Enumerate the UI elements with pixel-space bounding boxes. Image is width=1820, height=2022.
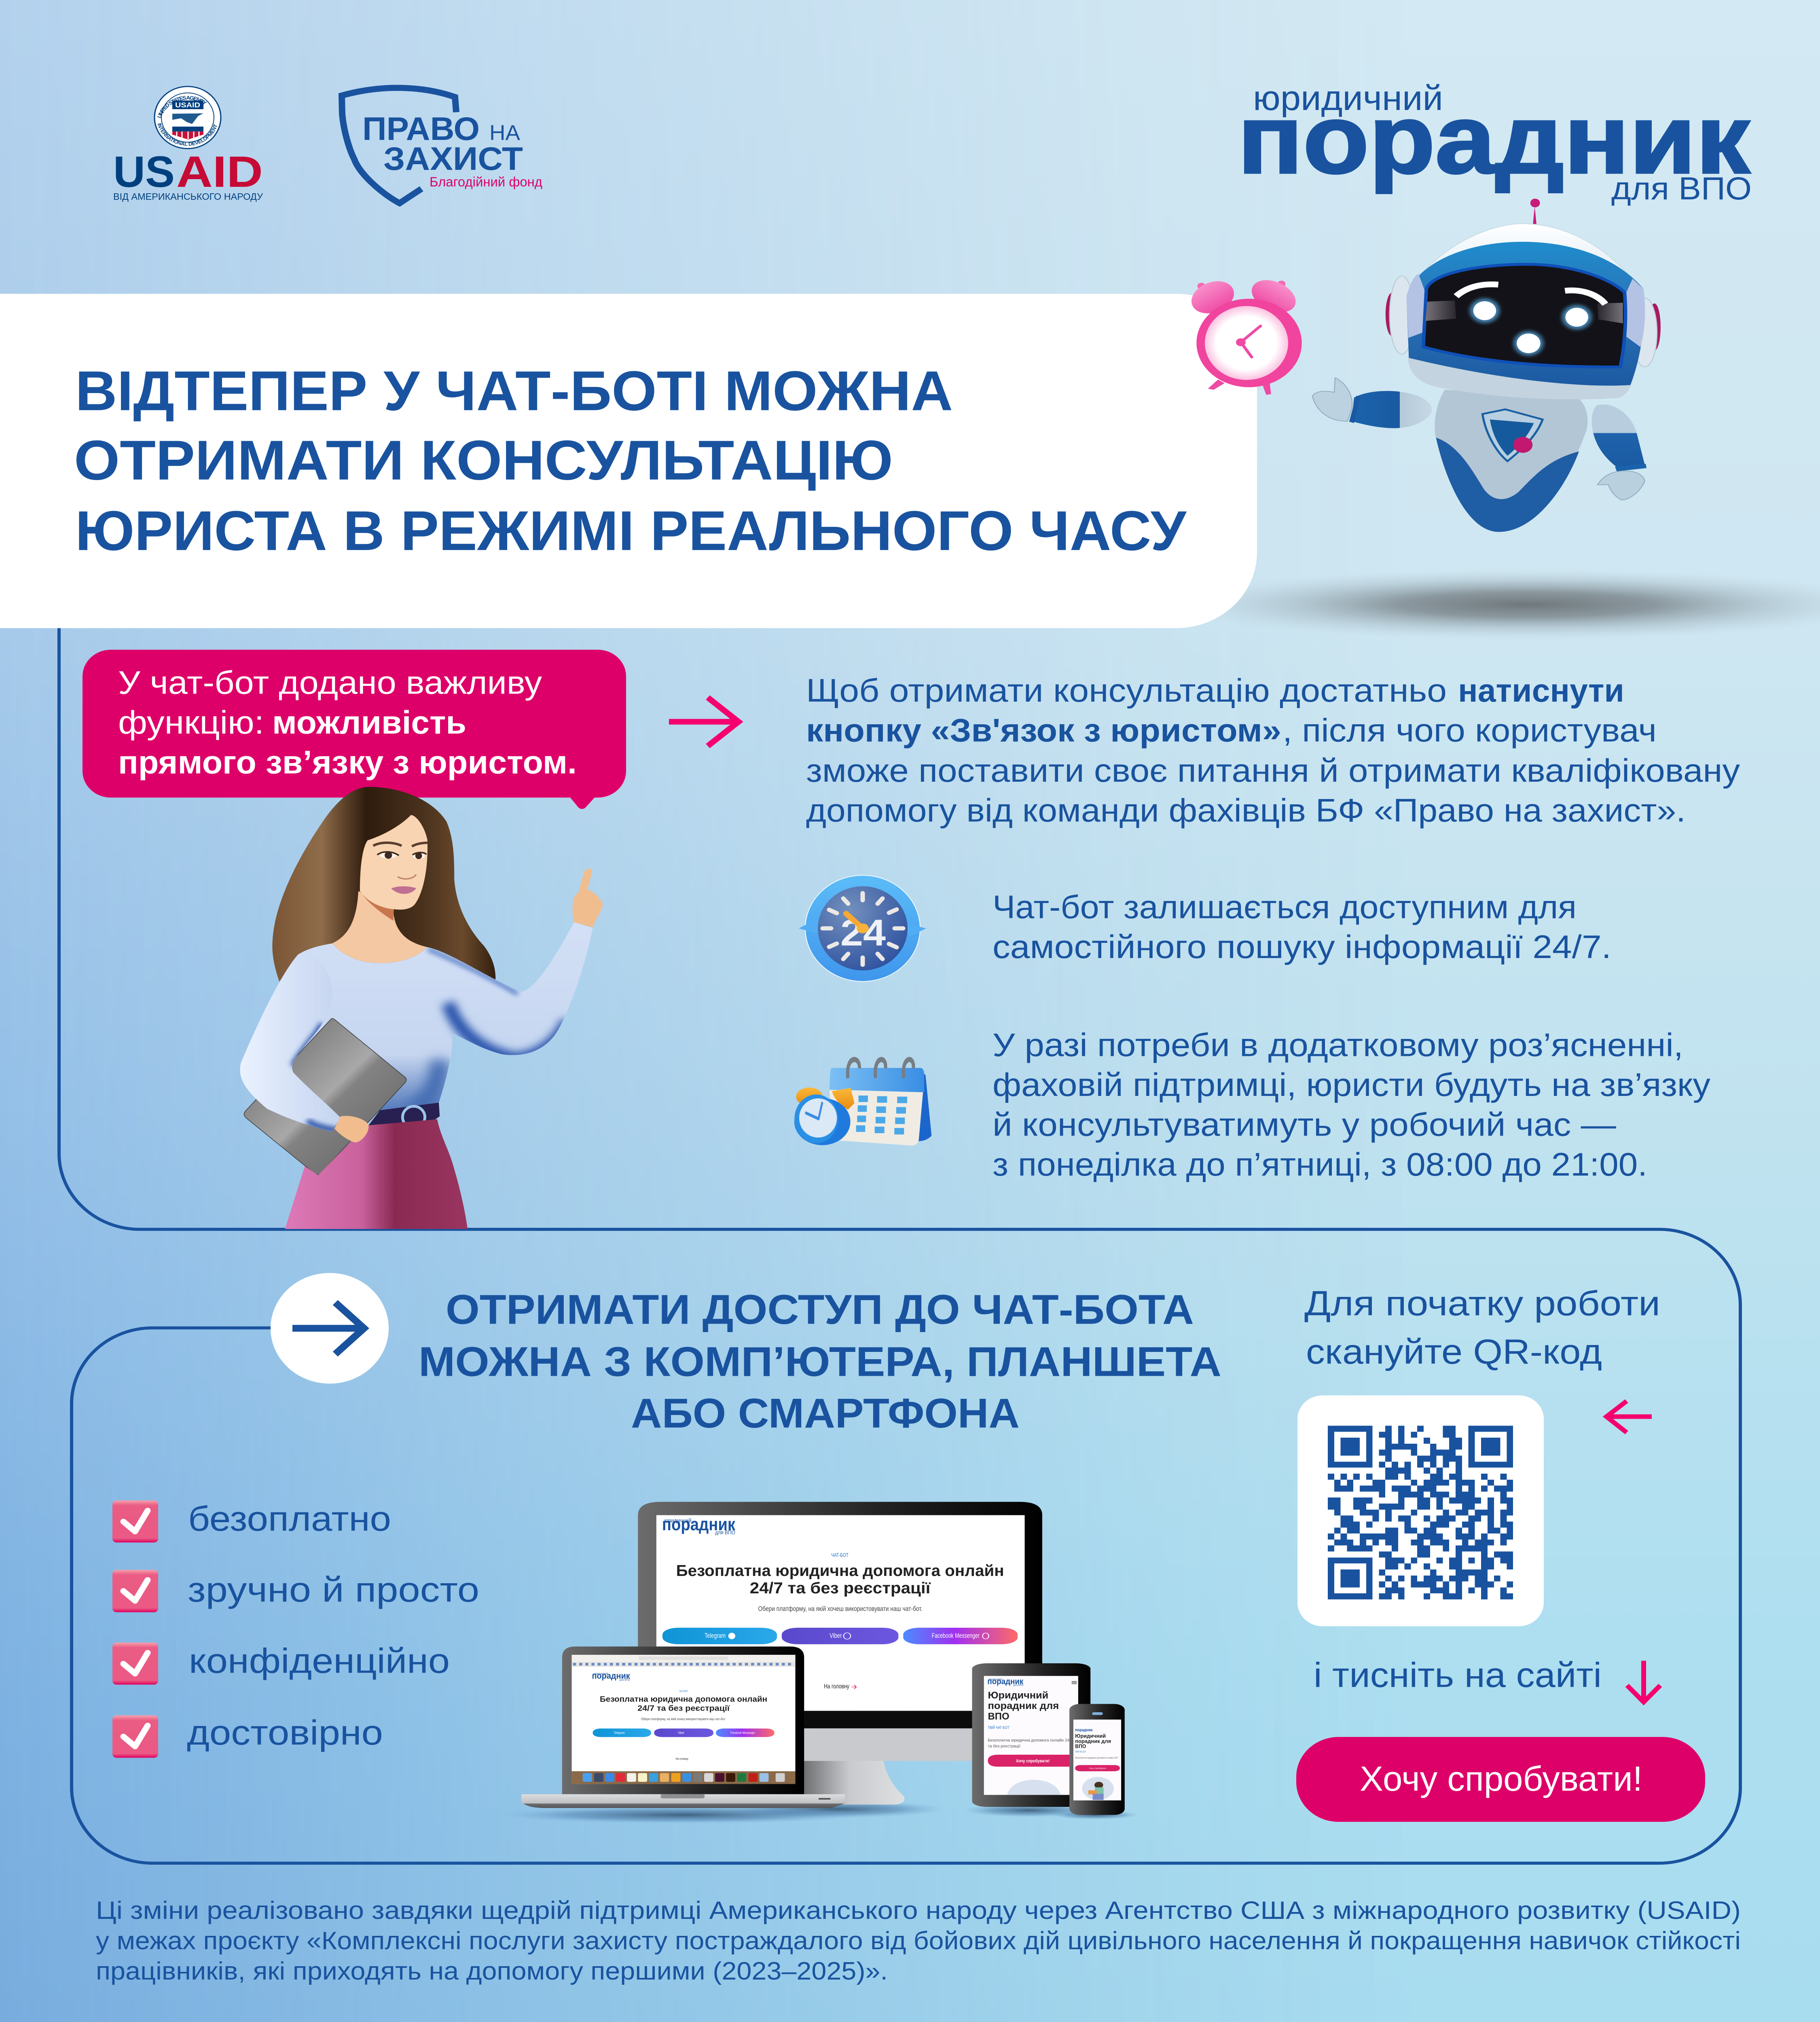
- icon: USAID seal: [154, 87, 221, 148]
- arrow: pink down arrow: [1627, 1661, 1660, 1702]
- text: working hours: фаховій підтримці, юристи будуть на зв’язку: [993, 1066, 1710, 1103]
- logo: Юридичний порадник для ВПО: порадник: [1238, 85, 1750, 194]
- monitor logo: [662, 1514, 735, 1536]
- text block: how to get consultation: , після чого користувач: [1282, 712, 1657, 749]
- checklist item: convenient: [112, 1570, 479, 1612]
- icon: white circle with blue arrow: [271, 1273, 389, 1383]
- monitor buttons: [662, 1628, 1018, 1644]
- heading: access to chat-bot: [419, 1286, 1221, 1436]
- monitor logo: юридичний: [664, 1517, 692, 1524]
- checklist item: confidential: конфіденційно: [189, 1641, 450, 1680]
- woman skirt: [285, 1119, 468, 1229]
- text: scan instruction: Для початку роботи: [1304, 1284, 1660, 1323]
- heading: access to chat-bot: ОТРИМАТИ ДОСТУП ДО ЧАТ-БОТА: [446, 1286, 1194, 1333]
- phone page text: [1075, 1728, 1118, 1759]
- illustration: robot: [1312, 199, 1661, 532]
- woman holding hand: [334, 1116, 369, 1142]
- footer note: працівників, які приходять на допомогу першими (2023–2025)».: [96, 1957, 888, 1985]
- logo wordmark: Право на захист: [362, 110, 523, 177]
- robot right arm: [1592, 404, 1646, 500]
- text: working hours: й консультуватимуть у робочий час —: [993, 1106, 1617, 1143]
- logo wordmark: USAID: AID: [176, 147, 263, 196]
- callout: pink speech bubble: [83, 650, 626, 809]
- logo wordmark: Право на захист: ЗАХИСТ: [383, 140, 523, 177]
- tablet person: [1007, 1780, 1060, 1795]
- callout text: У чат-бот додано важливу: [118, 664, 542, 701]
- text: working hours: [993, 1027, 1710, 1182]
- icon: calendar with alarm clock: [794, 1060, 931, 1146]
- arrow: pink left arrow: [1606, 1401, 1652, 1432]
- desktop monitor: [638, 1502, 1042, 1804]
- tablet page text: порадник для: [988, 1700, 1059, 1711]
- laptop page text: Безоплатна юридична допомога онлайн: [600, 1695, 767, 1703]
- woman pointing hand: [573, 869, 603, 927]
- tablet: [972, 1663, 1090, 1807]
- woman left arm: [240, 954, 341, 1132]
- text block: how to get consultation: натиснути: [1458, 673, 1624, 709]
- neck shadow: [360, 891, 394, 921]
- tablet page text: Безоплатна юридична допомога онлайн 24: [988, 1738, 1069, 1743]
- heading: main title: ВІДТЕПЕР У ЧАТ-БОТІ МОЖНА: [75, 360, 953, 422]
- text: available 24/7: Чат-бот залишається доступним для: [993, 889, 1577, 925]
- monitor page text: 24/7 та без реєстрації: [750, 1580, 931, 1597]
- laptop: порадник: [592, 1671, 630, 1681]
- woman face: [360, 815, 428, 909]
- text: available 24/7: [993, 889, 1611, 965]
- monitor buttons: Facebook Messenger: [932, 1631, 980, 1639]
- laptop: [521, 1647, 845, 1808]
- monitor back link: На головну: [824, 1683, 849, 1690]
- icon: brush shield: [342, 88, 456, 203]
- logo wordmark: Право на захист: НА: [489, 121, 521, 145]
- woman belt: [368, 1103, 440, 1128]
- checklist: [112, 1499, 479, 1758]
- tablet logo: юридичний: [989, 1678, 1002, 1681]
- laptop base: [521, 1794, 845, 1808]
- icon: USAID seal: USAID: [175, 101, 200, 109]
- icon: 24/7 clock: 24: [840, 912, 886, 954]
- button: try it: [1296, 1737, 1705, 1822]
- text: scan instruction: сканyйте QR-код: [1306, 1332, 1602, 1371]
- panel outline: connected rounded frame: [59, 626, 1740, 1863]
- illustration: woman pointing up: [240, 787, 603, 1229]
- robot ears: [1386, 276, 1661, 367]
- tablet page text: та без реєстрації: [988, 1744, 1020, 1748]
- checklist item: confidential: [112, 1641, 450, 1685]
- woman neck: [332, 891, 427, 963]
- checklist item: reliable: [112, 1713, 383, 1758]
- icon: 24/7 clock: [799, 875, 926, 981]
- laptop page text: ЧАТ-БОТ: [679, 1690, 688, 1693]
- phone try button: Хочу спробувати!: [1089, 1767, 1106, 1770]
- desktop monitor: порадник: [662, 1514, 735, 1534]
- woman shirt: [279, 922, 593, 1112]
- checklist item: convenient: зручно й просто: [188, 1570, 479, 1609]
- monitor buttons: Telegram: [705, 1631, 726, 1639]
- logo: Юридичний порадник для ВПО: юридичний: [1253, 78, 1443, 117]
- tagline: charitable foundation: Благодійний фонд: [430, 174, 542, 190]
- text block: how to get consultation: допомогу від команди фахівців БФ «Право на захист».: [806, 792, 1686, 829]
- text block: how to get consultation: Щоб отримати консультацію достатньо: [806, 673, 1447, 709]
- tagline: from the American people: ВІД АМЕРИКАНСЬКОГО НАРОДУ: [113, 192, 263, 202]
- callout text: функцію:: [118, 704, 264, 740]
- monitor buttons: Viber: [830, 1631, 842, 1639]
- heading: main title: [74, 360, 1187, 562]
- logo: USAID: [113, 87, 263, 202]
- monitor page text: Обери платформу, на якій хочеш використовувати наш чат-бот.: [758, 1605, 923, 1612]
- monitor page text: [676, 1552, 1004, 1612]
- text: scan instruction: [1304, 1284, 1660, 1371]
- phone page text: порадник для: [1075, 1739, 1111, 1744]
- logo wordmark: USAID: US: [113, 147, 175, 196]
- heading: main title: ЮРИСТА В РЕЖИМІ РЕАЛЬНОГО ЧАСУ: [75, 499, 1187, 562]
- phone page text: ВПО: [1075, 1744, 1086, 1749]
- text block: how to get consultation: [806, 673, 1740, 829]
- laptop dock: [572, 1771, 796, 1784]
- heading: main title: ОТРИМАТИ КОНСУЛЬТАЦІЮ: [74, 429, 893, 492]
- device shadows: [499, 1800, 1139, 1823]
- laptop page text: 24/7 та без реєстрації: [637, 1704, 730, 1713]
- illustration: device mockups: [499, 1502, 1139, 1823]
- laptop buttons: [593, 1728, 774, 1737]
- logo: Юридичний порадник для ВПО: для ВПО: [1611, 171, 1752, 206]
- laptop logo: [592, 1671, 630, 1681]
- robot body: [1435, 390, 1587, 532]
- tablet try button: [988, 1755, 1073, 1767]
- phone try button: [1075, 1765, 1120, 1771]
- laptop page text: Обери платформу, на якій хочеш використовувати наш чат-бот.: [641, 1717, 726, 1721]
- phone page text: Безоплатна юридична допомога онлайн 24/7: [1075, 1757, 1118, 1759]
- tablet page text: [988, 1681, 1077, 1748]
- heading: access to chat-bot: МОЖНА З КОМП’ЮТЕРА, ПЛАНШЕТА: [419, 1338, 1221, 1385]
- icon: pink alarm clock: [1184, 273, 1303, 395]
- text: working hours: з понеділка до п’ятниці, з 08:00 до 21:00.: [993, 1146, 1647, 1182]
- arrow: pink right arrow: [669, 698, 739, 746]
- tablet page text: Юридичний: [988, 1690, 1048, 1701]
- tablet: порадник: [987, 1677, 1024, 1686]
- checklist item: free: безоплатно: [188, 1499, 391, 1538]
- text: available 24/7: самостійного пошуку інформації 24/7.: [993, 929, 1611, 965]
- robot left arm: [1312, 378, 1432, 428]
- laptop: для ВПО: [620, 1679, 630, 1681]
- text: working hours: У разі потреби в додатковому роз’ясненні,: [993, 1027, 1683, 1063]
- phone person: [1082, 1777, 1114, 1800]
- QR code card: [1297, 1396, 1544, 1626]
- tablet logo: [987, 1677, 1024, 1687]
- monitor back link: [824, 1683, 856, 1690]
- tablet page text: ВПО: [988, 1711, 1009, 1722]
- text block: how to get consultation: кнопку «Зв'язок з юристом»: [806, 712, 1281, 749]
- phone page text: порадник: [1075, 1728, 1093, 1732]
- logo: Право на захист: [342, 88, 542, 203]
- panel: white headline banner: [0, 294, 1257, 628]
- woman hair: [272, 787, 495, 982]
- checklist item: free: [112, 1499, 391, 1542]
- monitor page text: Безоплатна юридична допомога онлайн: [676, 1562, 1004, 1580]
- text: click on site: і тисніть на сайті: [1314, 1655, 1602, 1694]
- heading: access to chat-bot: АБО СМАРТФОНА: [631, 1390, 1020, 1436]
- icon: USAID seal: UNITED STATES AGENCY: [156, 95, 208, 119]
- footer note: Ці зміни реалізовано завдяки щедрій підтримці Американського народу через Агентство США з міжнародного розвитку (USAID): [96, 1896, 1741, 1925]
- footer note: у межах проєкту «Комплексні послуги захисту постраждалого від бойових дій цивільного населення й покращення навичок стійкості: [96, 1927, 1741, 1955]
- footer note: [96, 1896, 1741, 1985]
- checklist item: reliable: достовірно: [187, 1713, 383, 1752]
- callout text: [118, 664, 577, 780]
- robot ground shadow: [1163, 569, 1820, 641]
- laptop logo: юридичний: [594, 1672, 608, 1675]
- woman tablet: [244, 1019, 406, 1175]
- desktop monitor: для ВПО: [715, 1529, 735, 1536]
- icon: USAID seal: INTERNATIONAL DEVELOPMENT: [156, 123, 219, 147]
- laptop buttons: Telegram: [614, 1731, 625, 1734]
- callout text: можливість: [272, 704, 466, 740]
- QR code modules: [1328, 1429, 1513, 1597]
- monitor page text: ЧАТ-БОТ: [831, 1552, 849, 1558]
- robot antenna: [1530, 199, 1540, 224]
- text block: how to get consultation: зможе поставити своє питання й отримати кваліфіковану: [806, 752, 1740, 789]
- phone page text: ТВІЙ ЧАТ-БОТ: [1075, 1751, 1086, 1753]
- laptop page text: На головну: [676, 1758, 688, 1761]
- robot screen face: [1423, 264, 1625, 367]
- laptop buttons: Facebook Messenger: [730, 1731, 755, 1734]
- logo wordmark: Право на захист: ПРАВО: [362, 110, 480, 147]
- tablet try button: Хочу спробувати!: [1016, 1759, 1050, 1763]
- logo wordmark: USAID: [113, 147, 263, 196]
- laptop buttons: Viber: [678, 1731, 684, 1734]
- phone page text: Юридичний: [1075, 1734, 1106, 1739]
- tablet logo: для ВПО: [1013, 1684, 1024, 1687]
- robot head: [1407, 224, 1645, 400]
- tablet page text: ТВІЙ ЧАТ-БОТ: [988, 1725, 1009, 1730]
- laptop page text: [600, 1690, 767, 1761]
- callout text: прямого зв’язку з юристом.: [118, 744, 577, 780]
- button: try it: Хочу спробувати!: [1360, 1759, 1642, 1798]
- smartphone: [1069, 1704, 1125, 1815]
